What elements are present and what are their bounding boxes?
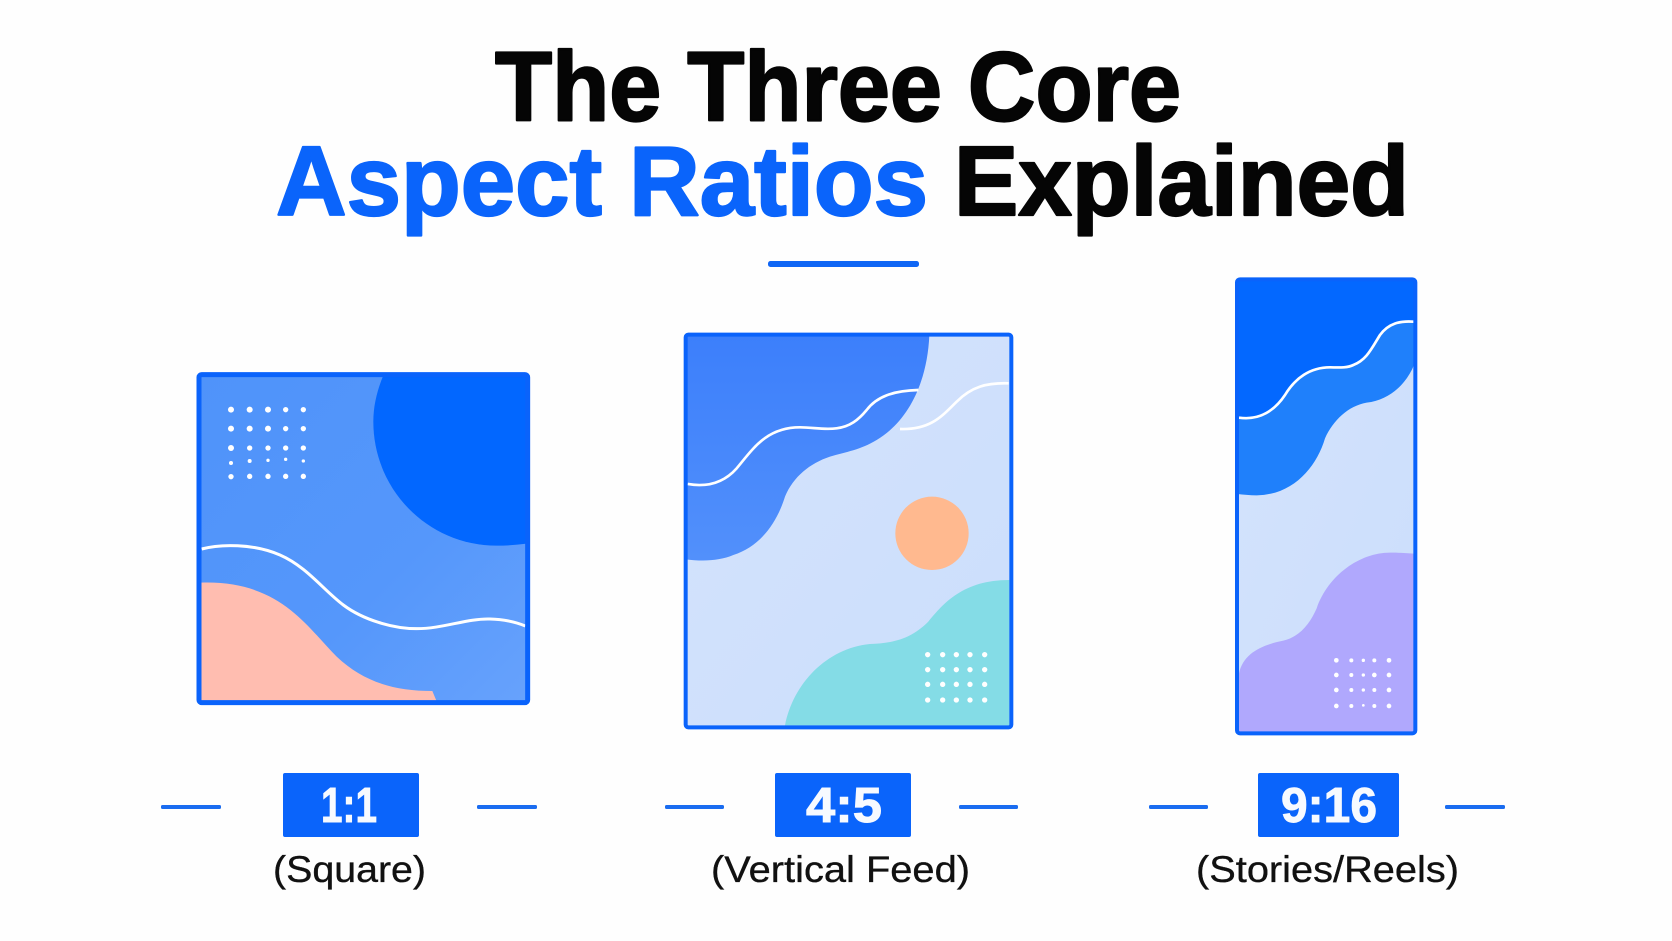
purple shape [1239, 553, 1414, 732]
label group: 9:16 Stories/Reels [1149, 773, 1505, 890]
vertical feed border [686, 335, 1011, 727]
white wave line right [900, 383, 1009, 429]
right dash [1445, 805, 1505, 809]
badge: 1:1 [283, 773, 419, 837]
dot grid [925, 652, 987, 703]
panel: 9:16 stories [1237, 279, 1416, 733]
blue wave shape [686, 335, 929, 561]
white wave line [202, 546, 525, 629]
left dash [161, 805, 221, 809]
dark blue circle [373, 375, 527, 546]
title [276, 32, 1409, 236]
panel: 1:1 square [199, 374, 528, 703]
badge: 4:5: 4:5 [806, 779, 882, 833]
caption: Vertical Feed: (Vertical Feed) [711, 849, 970, 890]
title underline [768, 261, 919, 267]
right dash [959, 805, 1018, 809]
salmon wave [201, 583, 437, 701]
left dash [1149, 805, 1208, 809]
orange circle [895, 497, 969, 570]
square border [199, 375, 528, 703]
left dash [665, 805, 724, 809]
caption: Stories/Reels: (Stories/Reels) [1196, 849, 1459, 890]
vertical feed background [686, 335, 1011, 727]
teal shape [785, 580, 1009, 725]
white wave line [688, 390, 918, 485]
title line 2 remainder: Explained: Explained [954, 126, 1409, 236]
square background [199, 374, 528, 703]
badge: 9:16: 9:16 [1281, 779, 1377, 833]
label group: 1:1 Square [161, 773, 537, 890]
panel: 4:5 vertical feed [686, 335, 1011, 727]
stories background [1237, 279, 1416, 733]
badge: 9:16 [1258, 773, 1399, 837]
badge: 4:5 [775, 773, 911, 837]
title line 1: The Three Core [495, 32, 1181, 142]
dark blue top [1237, 279, 1416, 418]
badge: 1:1: 1:1 [321, 779, 377, 833]
stories border [1237, 279, 1415, 733]
label group: 4:5 Vertical Feed [665, 773, 1018, 890]
caption: Square: (Square) [273, 849, 426, 890]
white wave line [1239, 321, 1414, 418]
dot grid [228, 407, 306, 479]
right dash [477, 805, 537, 809]
title highlight: Aspect Ratios: Aspect Ratios [276, 126, 928, 236]
mid blue wave shape [1237, 320, 1414, 495]
dot grid [1334, 658, 1391, 708]
